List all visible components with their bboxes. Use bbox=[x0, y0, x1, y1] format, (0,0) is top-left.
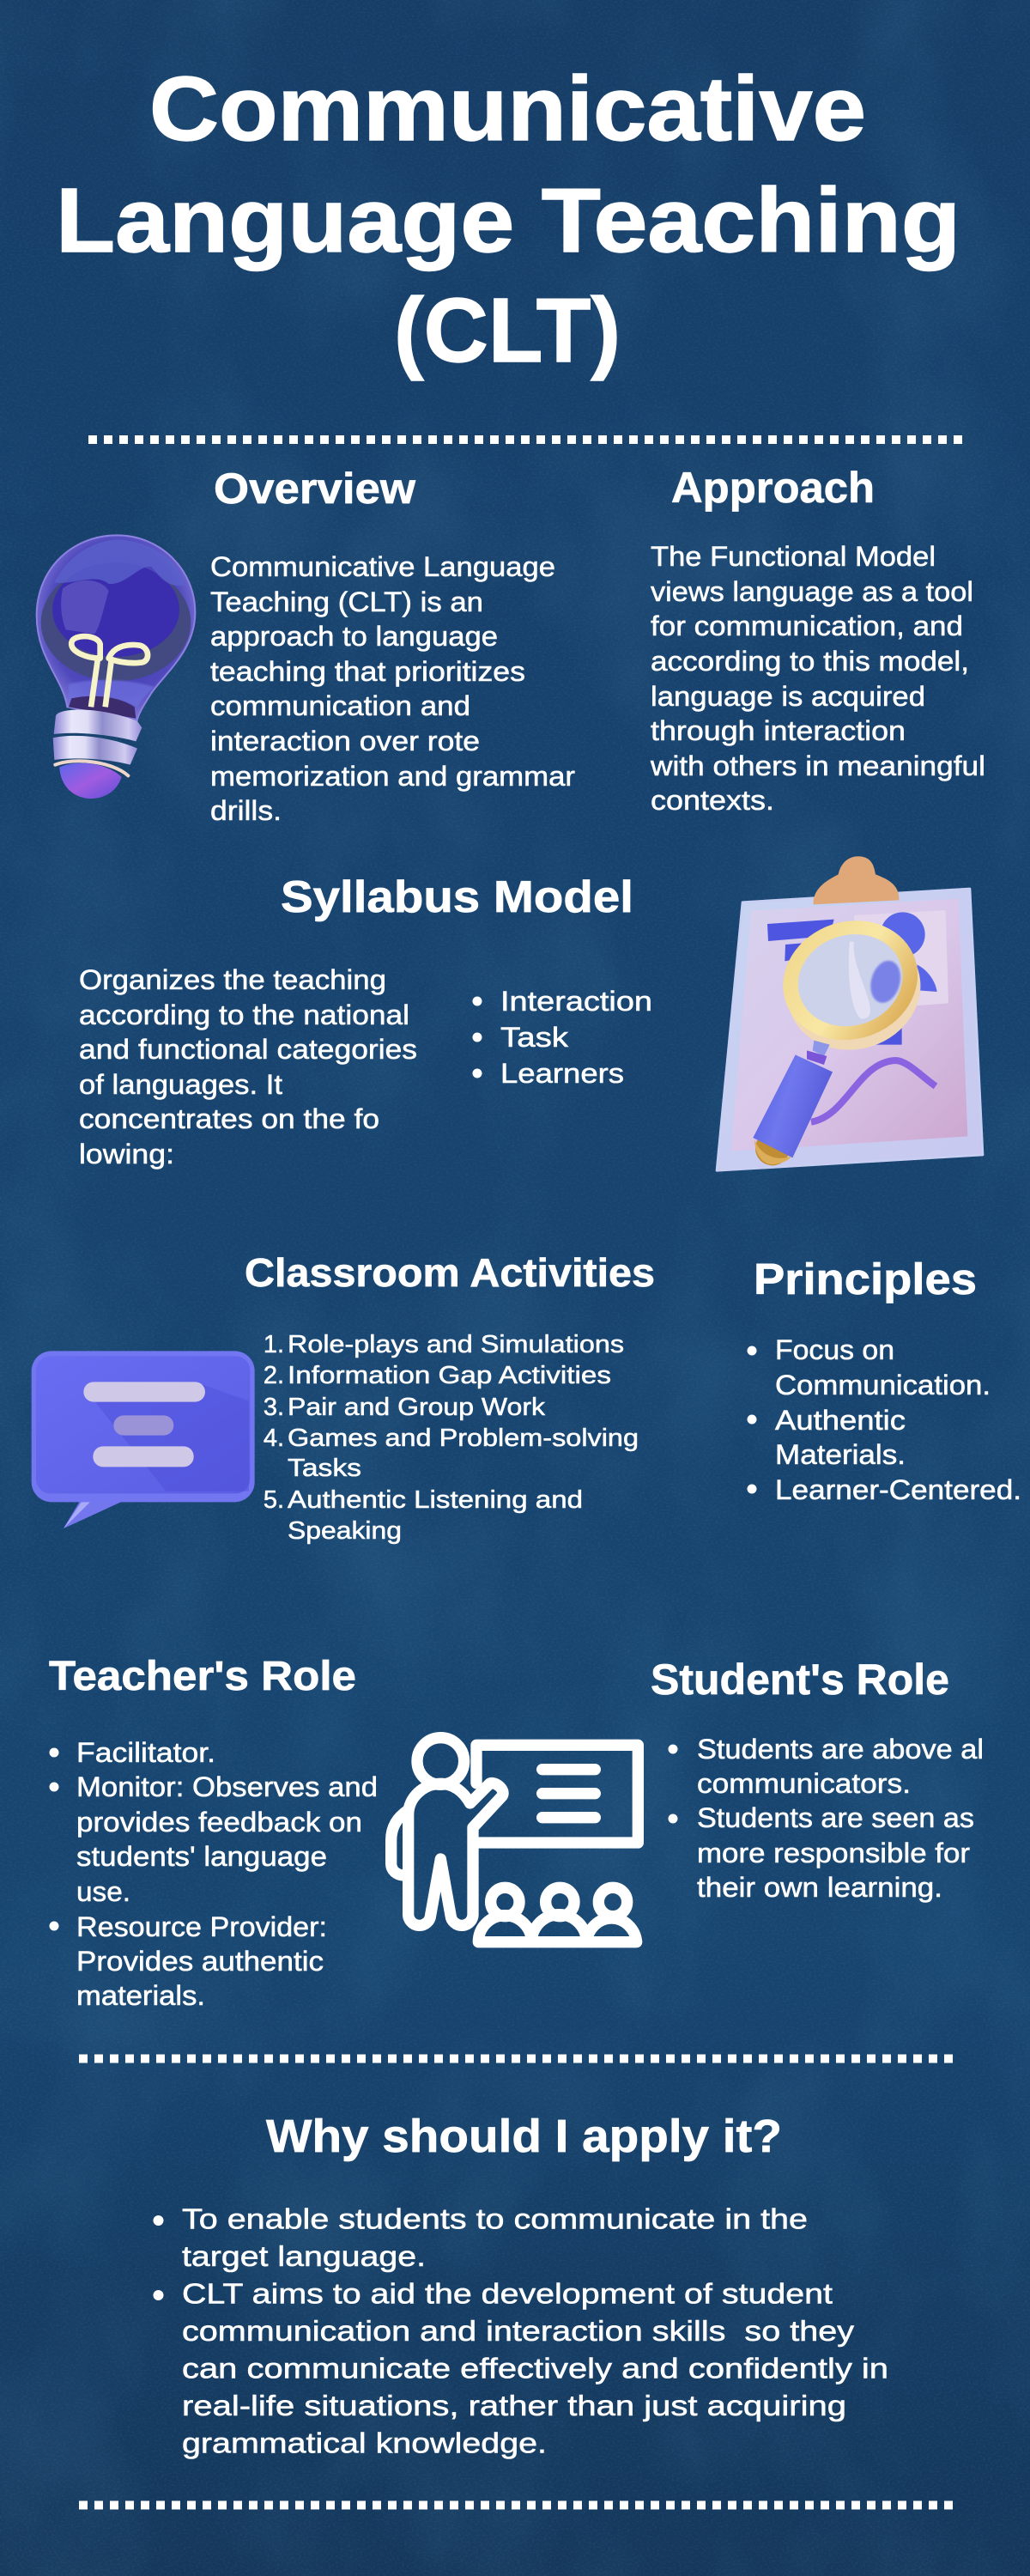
list: teacher's role bbox=[50, 1737, 378, 2011]
text: syllabus description: Organizes the teaching bbox=[79, 964, 386, 995]
text: syllabus description: according to the national bbox=[79, 999, 409, 1030]
list: activities: 3. bbox=[264, 1394, 284, 1421]
text: syllabus description: lowing: bbox=[79, 1139, 174, 1170]
list: teacher's role: Resource Provider: bbox=[76, 1911, 327, 1942]
panel: overview bbox=[37, 465, 575, 826]
list: reasons: target language. bbox=[182, 2240, 426, 2272]
text: overview body: interaction over rote bbox=[210, 726, 480, 756]
heading: classroom activities: Classroom Activities bbox=[245, 1250, 655, 1295]
list: teacher's role: provides feedback on bbox=[76, 1807, 362, 1838]
title: (CLT) bbox=[394, 280, 621, 381]
text: approach body: The Functional Model bbox=[651, 541, 936, 572]
list: teacher's role: materials. bbox=[76, 1980, 205, 2011]
panel: principles bbox=[747, 1255, 1021, 1505]
text: approach body: through interaction bbox=[651, 715, 906, 746]
heading: student's role: Student's Role bbox=[651, 1656, 949, 1704]
text: overview body: drills. bbox=[210, 795, 282, 826]
text: approach body: with others in meaningful bbox=[650, 750, 985, 781]
list: principles: Learner-Centered. bbox=[775, 1474, 1021, 1505]
list: reasons: communication and interaction skills so they bbox=[182, 2315, 855, 2347]
text: overview body bbox=[210, 551, 575, 826]
panel: classroom activities bbox=[32, 1250, 655, 1545]
heading: teacher's role: Teacher's Role bbox=[49, 1654, 356, 1699]
list: principles bbox=[747, 1334, 1021, 1505]
list: activities: Information Gap Activities bbox=[288, 1362, 611, 1389]
list: reasons: grammatical knowledge. bbox=[182, 2427, 547, 2459]
list: student's role: Students are seen as bbox=[697, 1802, 974, 1833]
text: syllabus description: concentrates on the fo bbox=[79, 1103, 379, 1134]
text: syllabus description: of languages. It bbox=[79, 1069, 282, 1100]
text: syllabus description: and functional categories bbox=[79, 1034, 417, 1065]
icon: teacher at board with students bbox=[391, 1738, 638, 1942]
text: overview body: approach to language bbox=[210, 621, 498, 652]
icon: chat bubble bbox=[32, 1351, 255, 1528]
list: reasons: CLT aims to aid the development of student bbox=[182, 2277, 833, 2310]
list: teacher's role: Provides authentic bbox=[76, 1946, 324, 1977]
panel: student's role bbox=[651, 1656, 984, 1903]
text: syllabus description bbox=[79, 964, 417, 1170]
list: principles: Authentic bbox=[775, 1405, 906, 1436]
list: activities: 1. bbox=[264, 1331, 284, 1358]
heading: why should I apply it: Why should I apply it? bbox=[266, 2111, 782, 2162]
list: student's role: Students are above al bbox=[697, 1734, 984, 1765]
list: activities: 5. bbox=[264, 1486, 284, 1514]
icon: light bulb bbox=[37, 535, 195, 799]
list: activities: Tasks bbox=[288, 1455, 361, 1482]
heading: overview: Overview bbox=[214, 465, 415, 513]
list: activities: Role-plays and Simulations bbox=[288, 1331, 624, 1358]
text: approach body bbox=[650, 541, 985, 816]
title: Communicative bbox=[149, 58, 866, 160]
heading: syllabus model: Syllabus Model bbox=[281, 872, 633, 922]
text: overview body: Communicative Language bbox=[210, 551, 555, 582]
panel: syllabus model bbox=[79, 856, 983, 1170]
list: student's role: more responsible for bbox=[697, 1838, 970, 1868]
list: syllabus focus: Interaction bbox=[500, 986, 652, 1017]
panel: teacher's role bbox=[49, 1654, 378, 2011]
text: approach body: language is acquired bbox=[651, 681, 925, 712]
list: teacher's role: use. bbox=[76, 1876, 130, 1907]
icon: clipboard with magnifier bbox=[717, 856, 983, 1170]
panel: why should I apply it bbox=[153, 2111, 888, 2459]
list: reasons: can communicate effectively and confidently in bbox=[182, 2353, 888, 2384]
text: approach body: for communication, and bbox=[651, 611, 963, 641]
text: overview body: teaching that prioritizes bbox=[210, 656, 525, 687]
list: syllabus focus bbox=[472, 986, 652, 1089]
text: approach body: contexts. bbox=[651, 785, 774, 816]
text: overview body: memorization and grammar bbox=[210, 761, 575, 792]
list: teacher's role: students' language bbox=[76, 1841, 327, 1872]
list: reasons: real-life situations, rather than just acquiring bbox=[182, 2390, 846, 2421]
list: student's role: communicators. bbox=[697, 1768, 911, 1799]
list: teacher's role: Facilitator. bbox=[76, 1737, 215, 1768]
list: student's role bbox=[668, 1734, 984, 1903]
list: student's role: their own learning. bbox=[697, 1872, 942, 1903]
text: approach body: views language as a tool bbox=[651, 576, 973, 607]
list: activities: 4. bbox=[264, 1425, 284, 1452]
list: principles: Materials. bbox=[775, 1439, 906, 1470]
panel: approach bbox=[650, 464, 985, 816]
list: activities: Games and Problem-solving bbox=[288, 1425, 639, 1452]
title bbox=[56, 58, 960, 381]
list: syllabus focus: Task bbox=[500, 1022, 569, 1053]
list: reasons bbox=[153, 2203, 888, 2459]
text: approach body: according to this model, bbox=[651, 646, 969, 677]
list: activities: 2. bbox=[264, 1362, 284, 1389]
heading: principles: Principles bbox=[754, 1255, 977, 1303]
list: teacher's role: Monitor: Observes and bbox=[76, 1771, 378, 1802]
list: syllabus focus: Learners bbox=[500, 1058, 624, 1089]
list: principles: Focus on bbox=[775, 1334, 894, 1365]
list: activities: Pair and Group Work bbox=[288, 1394, 546, 1421]
list: activities: Authentic Listening and bbox=[288, 1486, 583, 1514]
title: Language Teaching bbox=[56, 170, 960, 271]
list: reasons: To enable students to communicate in the bbox=[182, 2203, 808, 2234]
text: overview body: Teaching (CLT) is an bbox=[210, 586, 483, 617]
list: activities bbox=[264, 1331, 639, 1545]
heading: approach: Approach bbox=[671, 464, 875, 512]
list: activities: Speaking bbox=[288, 1517, 402, 1545]
text: overview body: communication and bbox=[210, 690, 470, 721]
list: principles: Communication. bbox=[775, 1370, 991, 1400]
